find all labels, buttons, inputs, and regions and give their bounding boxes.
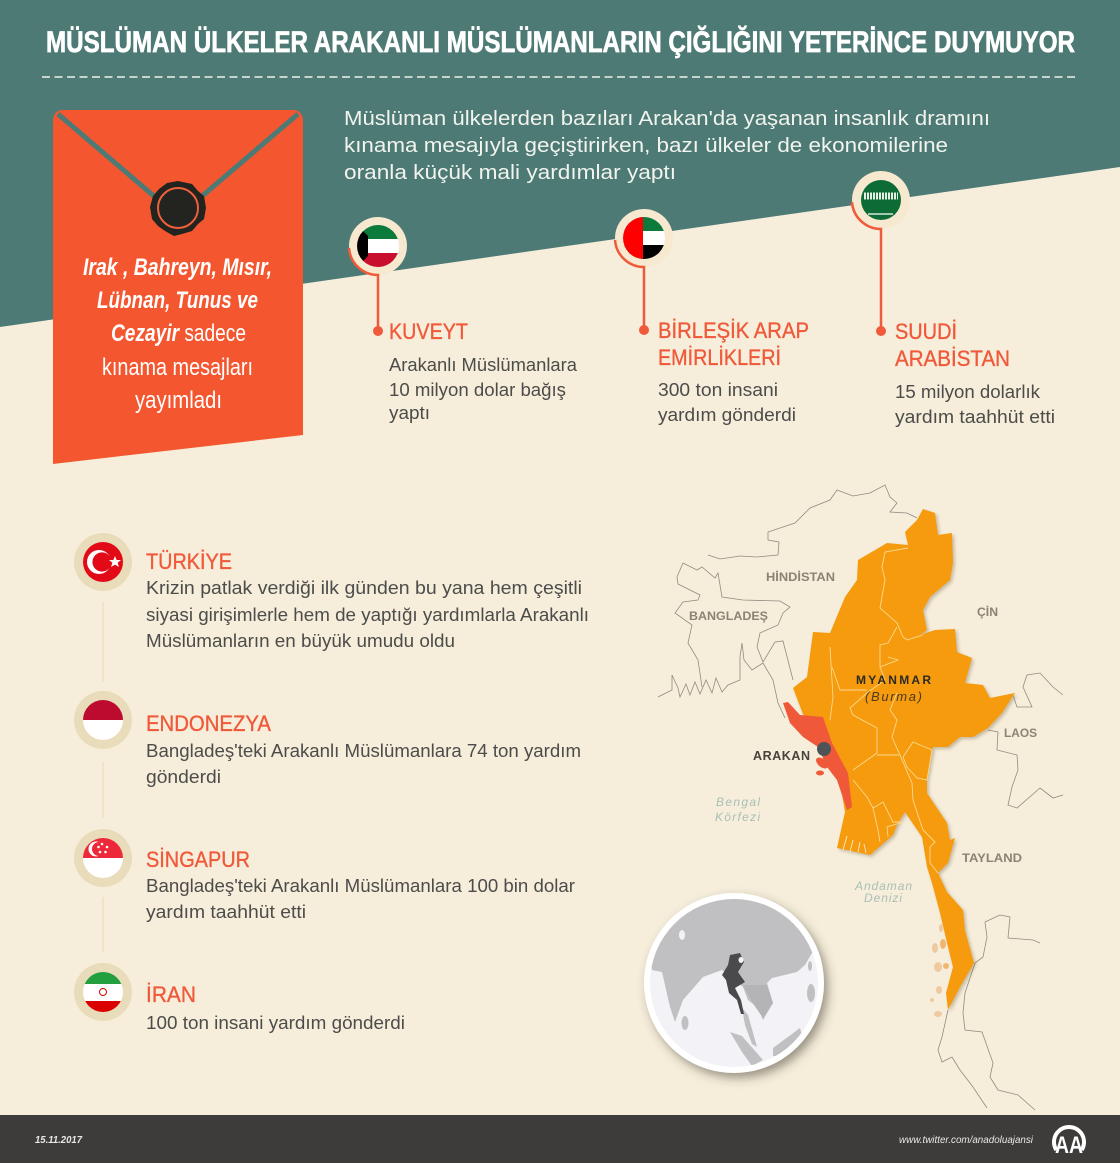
map labels: BANGLADEŞ: [689, 609, 768, 623]
panel: Suudi Arabistan: [852, 171, 1055, 427]
map labels: Denizi: [864, 891, 902, 905]
heading: TÜRKİYE: [146, 549, 232, 574]
heading: İRAN: [146, 982, 196, 1007]
text block: 15 milyon dolarlık: [895, 382, 1041, 402]
Arakan region: [783, 702, 852, 810]
map labels: MYANMAR: [856, 673, 931, 687]
Asian land mass: [652, 899, 812, 1022]
Arakan marker: [817, 742, 831, 756]
panel: Kuveyt: [349, 217, 578, 423]
text block: 300 ton insani: [658, 380, 778, 400]
map labels: Andaman: [854, 879, 912, 893]
heading: ARABİSTAN: [895, 346, 1010, 371]
envelope text: Irak , Bahreyn, Mısır,: [83, 254, 272, 281]
panel: Birleşik Arap Emirlikleri: [615, 209, 809, 425]
panel: envelope: [53, 110, 303, 464]
text block: 10 milyon dolar bağış: [389, 380, 566, 400]
map labels: Körfezi: [715, 810, 760, 824]
text block: gönderdi: [146, 767, 221, 787]
footer bar: [0, 1115, 1120, 1163]
text block: Arakanlı Müslümanlara: [389, 355, 578, 375]
heading: SİNGAPUR: [146, 847, 250, 872]
panel: Endonezya: [74, 691, 581, 787]
envelope text: Lübnan, Tunus ve: [97, 287, 258, 314]
envelope text: [83, 254, 272, 414]
intro text: [344, 108, 990, 184]
map: Myanmar and neighbours: [658, 485, 1063, 1110]
map labels: TAYLAND: [962, 851, 1022, 865]
text block: [895, 382, 1055, 427]
heading: BİRLEŞİK ARAP: [658, 318, 809, 343]
heading: [658, 318, 809, 370]
icon: Saudi flag pin: [852, 171, 910, 336]
text block: yardım gönderdi: [658, 405, 796, 425]
icon: Indonesia flag: [74, 691, 132, 749]
panel: İran: [74, 963, 405, 1033]
map labels: [689, 569, 1037, 905]
heading: ENDONEZYA: [146, 711, 271, 736]
map labels: HİNDİSTAN: [766, 569, 835, 584]
twitter address: www.twitter.com/anadoluajansi: [899, 1134, 1034, 1146]
envelope text: yayımladı: [135, 387, 222, 414]
icon: wax seal: [150, 181, 206, 236]
map labels: Bengal: [716, 795, 760, 809]
internal state borders: [830, 548, 938, 873]
intro text: Müslüman ülkelerden bazıları Arakan'da yaşanan insanlık dramını: [344, 108, 990, 130]
text block: yaptı: [389, 403, 430, 423]
date: 15.11.2017: [35, 1135, 82, 1146]
heading: SUUDİ: [895, 319, 957, 344]
Myanmar territory: [793, 509, 1015, 1010]
text block: Krizin patlak verdiği ilk günden bu yana hem çeşitli: [146, 578, 582, 598]
envelope text: kınama mesajları: [102, 354, 253, 381]
text block: [146, 876, 575, 922]
Myanmar highlighted: [722, 953, 745, 1014]
text block: [146, 578, 589, 651]
envelope text: Cezayir sadece: [111, 320, 246, 347]
map labels: LAOS: [1004, 726, 1037, 740]
text block: Bangladeş'teki Arakanlı Müslümanlara 100 bin dolar: [146, 876, 575, 896]
offshore islands: [930, 924, 949, 1017]
intro text: oranla küçük mali yardımlar yaptı: [344, 162, 676, 184]
map labels: (Burma): [865, 689, 922, 704]
panel: Singapur: [74, 829, 575, 922]
icon: Kuwait flag pin: [349, 217, 407, 336]
icon: Singapore flag: [74, 829, 132, 887]
map labels: ÇİN: [977, 604, 998, 619]
text block: [389, 355, 578, 423]
text block: [146, 741, 581, 787]
text block: 100 ton insani yardım gönderdi: [146, 1013, 405, 1033]
envelope flap lines: [58, 114, 298, 197]
panel: Türkiye: [74, 533, 589, 651]
icon: AA logo: AA: [1055, 1132, 1083, 1159]
icon: Turkey flag: [74, 533, 132, 591]
text block: yardım taahhüt etti: [146, 902, 306, 922]
map labels: ARAKAN: [753, 749, 810, 763]
icon: Iran flag: [74, 963, 132, 1021]
intro text: kınama mesajıyla geçiştirirken, bazı ülkeler de ekonomilerine: [344, 135, 948, 157]
text block: siyasi girişimlerle hem de yaptığı yardımlarla Arakanlı: [146, 605, 589, 625]
text block: Müslümanların en büyük umudu oldu: [146, 631, 455, 651]
text block: Bangladeş'teki Arakanlı Müslümanlara 74 ton yardım: [146, 741, 581, 761]
neighbour borders: [658, 485, 1063, 1110]
text block: [658, 380, 796, 425]
text block: yardım taahhüt etti: [895, 407, 1055, 427]
heading: EMİRLİKLERİ: [658, 345, 781, 370]
locator globe: [640, 880, 830, 1073]
icon: UAE flag pin: [615, 209, 673, 335]
teal header background: [0, 0, 1120, 327]
heading: [895, 319, 1010, 371]
heading: KUVEYT: [389, 319, 468, 344]
